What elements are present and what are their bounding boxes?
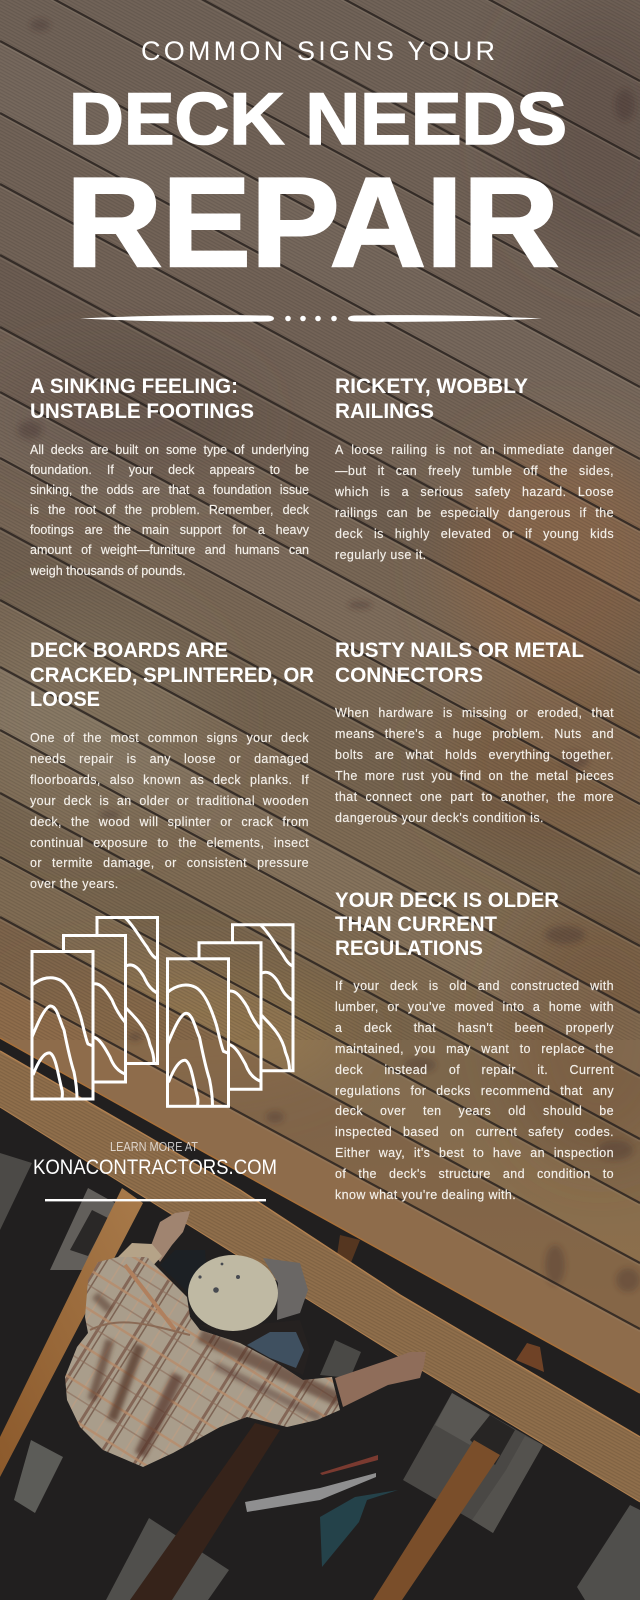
tools: [245, 1455, 398, 1567]
body text: unstable footings: footings are the main support for a heavy: [30, 523, 309, 537]
joists: [0, 1188, 544, 1600]
heading: rusty nails: RUSTY NAILS OR METAL: [335, 638, 584, 662]
body text: regulations: deck over ten years old should be: [335, 1104, 614, 1118]
heading: older than regulations: YOUR DECK IS OLDER: [335, 888, 559, 912]
body text: regulations: maintained, you may want to replace the: [335, 1042, 614, 1056]
cap brim: [263, 1258, 308, 1320]
shirt: [65, 1257, 340, 1467]
body text: rusty nails: [335, 706, 614, 825]
body text: deck boards: your deck is an older or traditional wooden: [30, 794, 309, 808]
learn more label: LEARN MORE AT: [110, 1140, 198, 1154]
panel: a sinking feeling: [30, 374, 310, 578]
heading: deck boards cracked: DECK BOARDS ARE: [30, 638, 228, 662]
body text: railings: —but it can freely tumble off the sides,: [335, 464, 614, 478]
body text: rusty nails: bolts are what holds everything together.: [335, 748, 614, 762]
body text: regulations: of the deck's structure and condition to: [335, 1167, 614, 1181]
body text: deck boards: over the years.: [30, 877, 119, 891]
body text: regulations: know what you're dealing with.: [335, 1188, 516, 1202]
body text: unstable footings: weigh thousands of pounds.: [30, 564, 186, 578]
heading: a sinking feeling: UNSTABLE FOOTINGS: [30, 399, 254, 423]
body text: regulations: inspected based on current safety codes.: [335, 1125, 614, 1139]
body text: rusty nails: that connect one part to another, the more: [335, 790, 614, 804]
body text: rusty nails: When hardware is missing or eroded, that: [335, 706, 614, 720]
knots: [18, 19, 640, 1292]
body text: deck boards: deck, the wood will splinter or crack from: [30, 815, 309, 829]
body text: regulations: regulations for decks recommend that any: [335, 1084, 614, 1098]
body text: regulations: Either way, it's best to have an inspection: [335, 1146, 614, 1160]
heading: a sinking feeling: A SINKING FEELING:: [30, 374, 238, 398]
heading: older than regulations: THAN CURRENT: [335, 912, 497, 936]
body text: regulations: lumber, or you've moved into a home with: [335, 1000, 614, 1014]
heading: older than regulations: REGULATIONS: [335, 936, 483, 960]
body text: unstable footings: [30, 443, 310, 578]
body text: regulations: deck instead of repair it. Current: [335, 1063, 614, 1077]
tonal patches: [0, 0, 640, 1160]
body text: rusty nails: dangerous your deck's condition is.: [335, 811, 544, 825]
heading: deck boards cracked: [30, 638, 314, 711]
heading: rusty nails: CONNECTORS: [335, 663, 483, 687]
cap: [188, 1255, 278, 1331]
panel: rickety wobbly railings: [334, 374, 614, 562]
lower deck board: [0, 1051, 640, 1502]
heading: rickety wobbly railings: RICKETY, WOBBLY: [335, 374, 528, 398]
heading: a sinking feeling: [30, 374, 254, 423]
right forearm and hand: [335, 1352, 426, 1407]
body text: regulations: a deck that hasn't been properly: [335, 1021, 614, 1035]
body text: railings: [334, 443, 614, 562]
body text: deck boards: floorboards, also known as deck planks. If: [30, 773, 309, 787]
body text: unstable footings: foundation. If your deck appears to be: [30, 463, 309, 477]
heading: deck boards cracked: LOOSE: [30, 687, 100, 711]
body text: deck boards: or termite damage, or consistent pressure: [30, 856, 309, 870]
body text: regulations: [335, 979, 614, 1202]
body text: unstable footings: is the root of the problem. Remember, deck: [30, 503, 309, 517]
panel: deck boards cracked: [30, 638, 314, 891]
title: repair: REPAIR: [66, 151, 559, 293]
body text: railings: A loose railing is not an immediate danger: [335, 443, 614, 457]
body text: unstable footings: amount of weight—furniture and humans can: [30, 543, 309, 557]
dark legs behind worker: [160, 1250, 207, 1295]
title: common signs your: COMMON SIGNS YOUR: [141, 36, 495, 66]
heading: older than regulations: [335, 888, 559, 960]
body text: unstable footings: sinking, the odds are that a foundation issue: [30, 483, 309, 497]
body text: rusty nails: means there's a huge problem. Nuts and: [335, 727, 614, 741]
body text: deck boards: One of the most common signs your deck: [30, 731, 309, 745]
heading: deck boards cracked: CRACKED, SPLINTERED, OR: [30, 663, 314, 687]
body text: railings: railings can be especially dangerous if the: [335, 506, 614, 520]
footer rule: [45, 1199, 266, 1201]
heading: rickety wobbly railings: RAILINGS: [335, 399, 434, 423]
worker: [60, 1211, 426, 1475]
icon: wood planks right set: [168, 925, 294, 1106]
body text: deck boards: [30, 731, 309, 891]
panel: rusty nails: [335, 638, 614, 825]
body text: railings: regularly use it.: [335, 548, 427, 562]
concrete blocks: [0, 1153, 640, 1600]
body text: deck boards: continual exposure to the elements, insect: [30, 836, 309, 850]
website url: KONACONTRACTORS.COM: [33, 1155, 277, 1179]
orange edge of upper board: [0, 1038, 640, 1393]
body text: deck boards: needs repair is any loose or damaged: [30, 752, 309, 766]
panel: older than current regulations: [335, 888, 614, 1202]
left forearm and hand: [150, 1211, 190, 1262]
body text: unstable footings: All decks are built on some type of underlying: [30, 443, 309, 457]
title: deck needs: DECK NEEDS: [69, 79, 567, 160]
heading: rickety wobbly railings: [335, 374, 528, 423]
heading: rusty nails: [335, 638, 584, 687]
dark void under the deck: [0, 1038, 640, 1600]
body text: rusty nails: The more rust you find on the metal pieces: [335, 769, 614, 783]
body text: regulations: If your deck is old and constructed with: [335, 979, 614, 993]
title divider: [80, 315, 542, 322]
body text: railings: deck is highly elevated or if young kids: [335, 527, 614, 541]
icon: wood planks left set: [32, 918, 158, 1099]
body text: railings: which is a serious safety hazard. Loose: [335, 485, 614, 499]
